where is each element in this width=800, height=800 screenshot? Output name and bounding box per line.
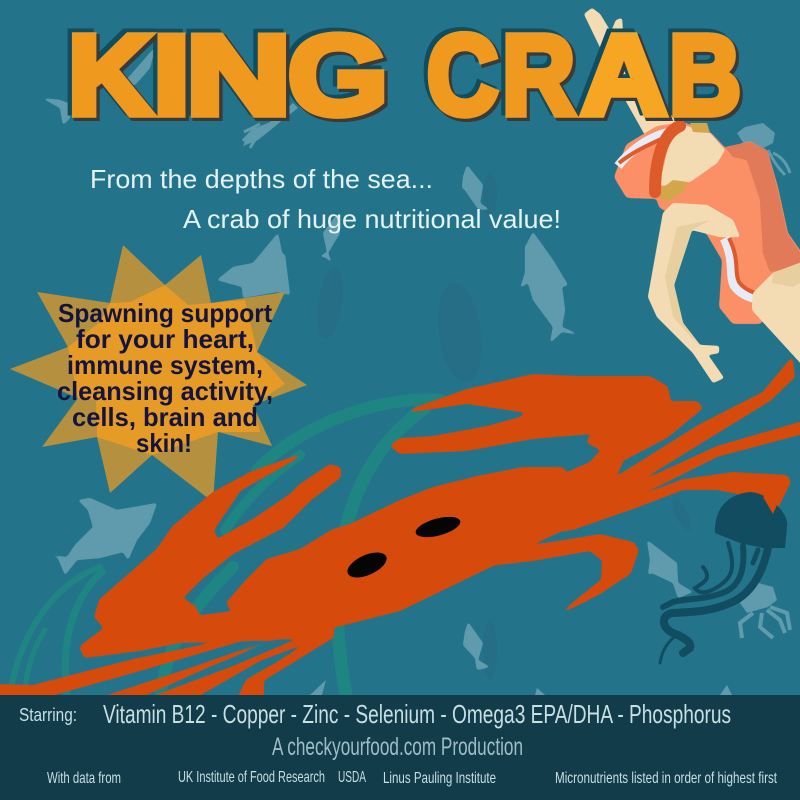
title shadow dark blue: C: [424, 9, 494, 135]
left legs: [0, 636, 256, 700]
title shadow dark blue: K: [64, 9, 148, 135]
crab: [0, 358, 800, 700]
title shadow grey: N: [188, 14, 294, 140]
sources: USDA: [338, 769, 366, 786]
title shadow dark blue: N: [182, 9, 288, 135]
title shadow dark blue: I: [150, 9, 186, 135]
title shadow grey: I: [156, 14, 192, 140]
lower arm: [648, 203, 740, 383]
title face: A: [581, 12, 667, 138]
callout text: for your heart,: [76, 324, 254, 354]
title shadow dark blue: R: [498, 9, 572, 135]
star core: [68, 285, 285, 455]
star shape: [10, 245, 307, 502]
sources: With data from: [47, 770, 121, 787]
title shadow grey: [70, 14, 744, 140]
title shadow grey: B: [672, 14, 744, 140]
suit stripes: [618, 132, 670, 166]
body shade: [725, 142, 800, 272]
eyes: [344, 547, 390, 583]
title shadow dark blue: A: [578, 9, 664, 135]
tagline: A crab of huge nutritional value!: [183, 204, 561, 234]
title face: [68, 12, 741, 138]
callout text: cells, brain and: [72, 402, 258, 432]
body: [180, 463, 617, 642]
title face: R: [502, 12, 575, 138]
title shadow grey: A: [584, 14, 670, 140]
title face: N: [186, 12, 291, 138]
production credit: A checkyourfood.com Production: [272, 733, 523, 761]
background sea creatures: [42, 47, 790, 695]
starring label: Starring:: [19, 705, 77, 725]
body: [615, 123, 800, 323]
title shadow dark blue: G: [284, 9, 384, 135]
title shadow grey: C: [430, 14, 500, 140]
callout text: immune system,: [67, 350, 263, 380]
chest: [660, 125, 725, 186]
tagline: From the depths of the sea...: [90, 164, 433, 194]
thigh: [752, 261, 800, 368]
title face: K: [68, 12, 152, 138]
callout text: skin!: [136, 428, 192, 458]
footer: [0, 695, 800, 800]
sources: UK Institute of Food Research: [178, 769, 325, 786]
sources: Linus Pauling Institute: [383, 770, 496, 787]
tagline: [90, 164, 561, 234]
title face: B: [669, 12, 741, 138]
right legs: [575, 358, 794, 515]
title shadow dark blue: B: [666, 9, 738, 135]
callout text: Spawning support: [58, 298, 272, 328]
title face: G: [288, 12, 388, 138]
right claw: [391, 375, 702, 493]
jellyfish: [660, 492, 787, 663]
leg claw tip over jellyfish: [763, 480, 788, 514]
left claw: [80, 453, 340, 657]
title: [64, 9, 744, 140]
callout text: cleansing activity,: [57, 376, 273, 406]
diver figure: [584, 8, 800, 383]
title shadow dark blue: [64, 9, 738, 135]
seaweed: [10, 399, 440, 700]
raised arm: [584, 8, 677, 135]
sources: [47, 769, 777, 787]
leg stripes: [725, 238, 757, 298]
title face: C: [427, 12, 498, 138]
title face: I: [153, 12, 190, 138]
callout text: [57, 298, 273, 458]
title shadow grey: G: [290, 14, 390, 140]
title shadow grey: R: [504, 14, 578, 140]
title shadow grey: K: [70, 14, 154, 140]
starburst callout: [10, 245, 307, 502]
